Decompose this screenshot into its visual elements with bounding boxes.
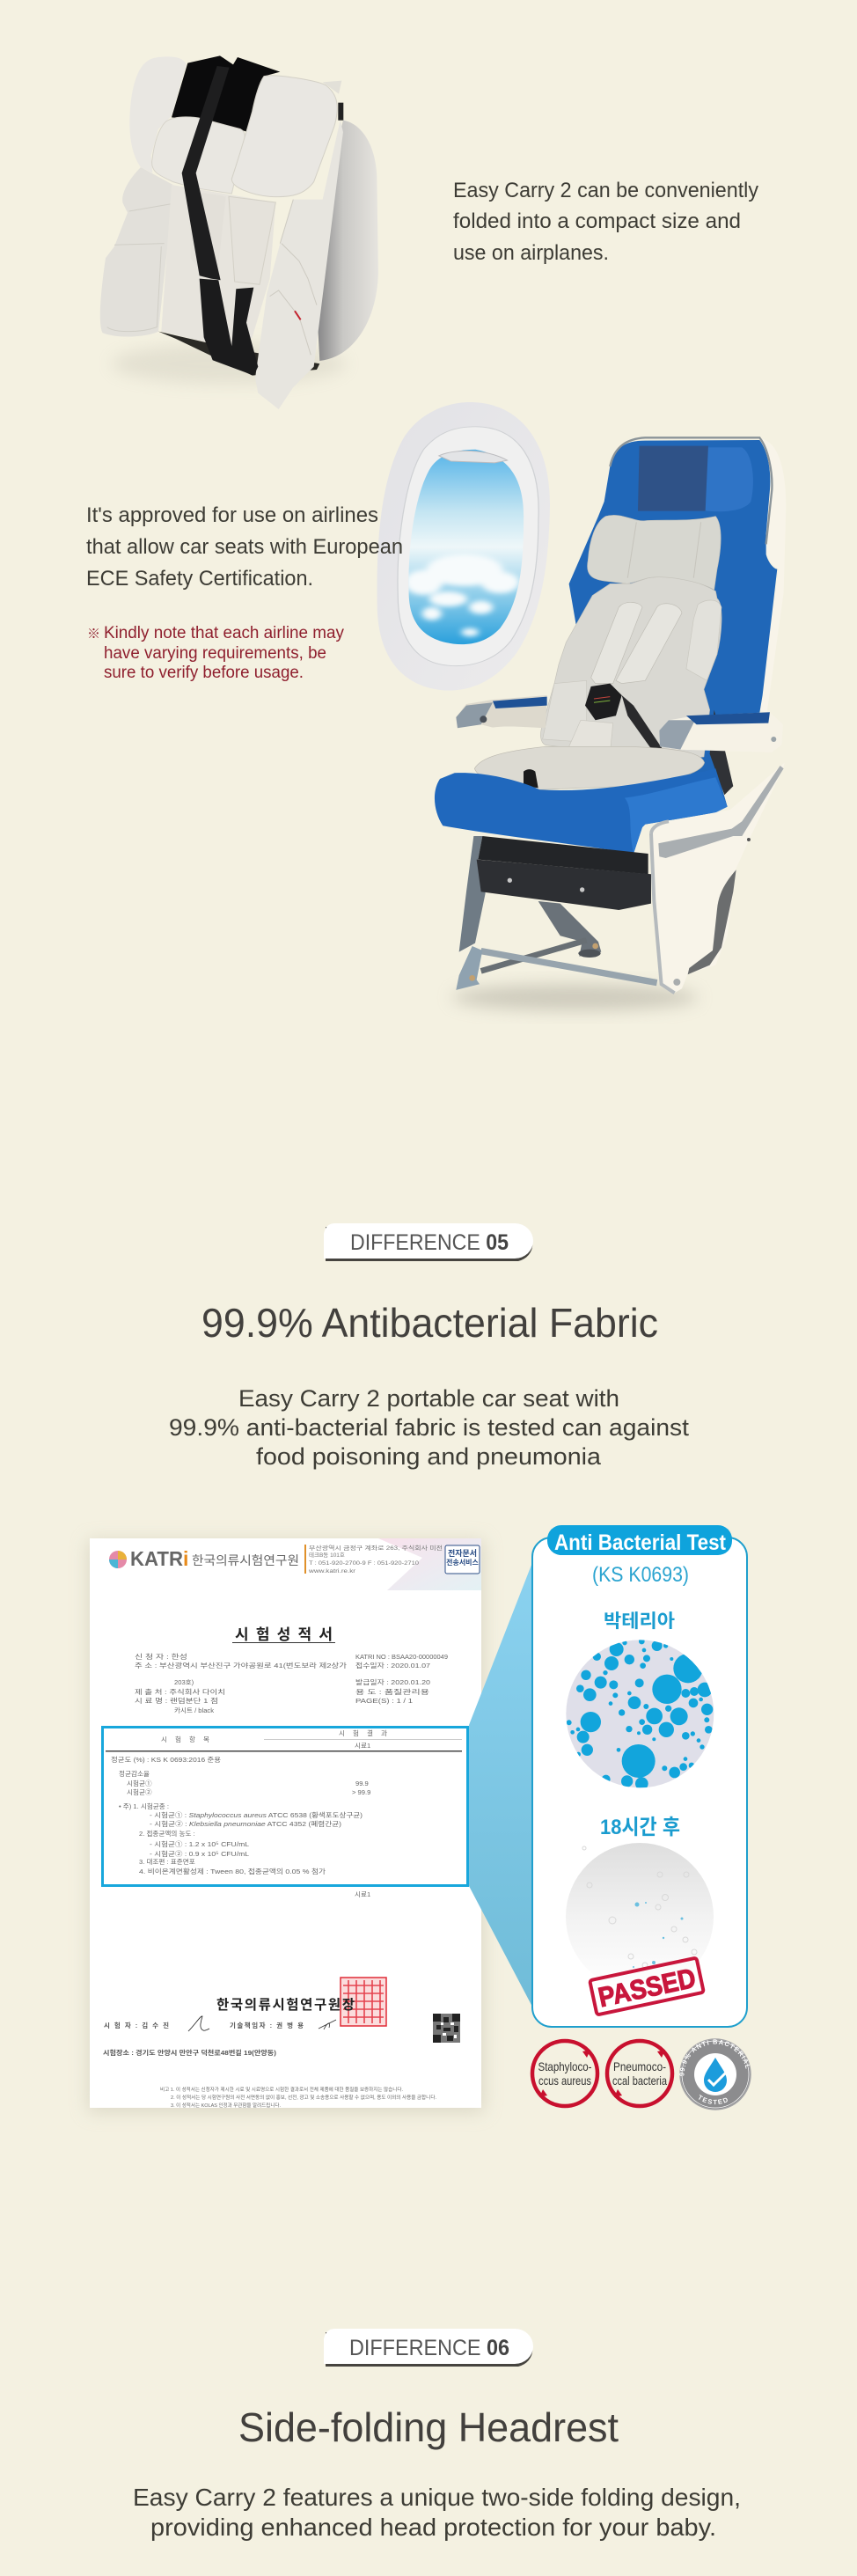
blue seat cushion [435, 768, 728, 854]
text: headrest description [133, 2484, 741, 2541]
note: airline requirements [87, 624, 344, 682]
table: test results: 99.9 [355, 1780, 369, 1787]
text: headrest description: Easy Carry 2 features a unique two-side folding design, [133, 2484, 741, 2511]
table: test results: 시 험 항 목 [161, 1736, 209, 1743]
icon: 99.9% anti bacterial tested seal: 99.9% ANTI BACTERIAL [679, 2039, 750, 2076]
logo: KATRI: KATR [130, 1547, 183, 1570]
blue seat back [569, 440, 777, 807]
signature block: 시험장소 : 경기도 안양시 만안구 덕천로48번길 19(안양동) [103, 2048, 277, 2057]
text: institute address: www.katri.re.kr [308, 1568, 356, 1574]
dish: with bacteria [566, 1639, 714, 1790]
text: folding description: use on airplanes. [453, 241, 609, 265]
headrest [638, 446, 753, 511]
note: airline requirements: have varying requirements, be [104, 644, 326, 663]
table: test results: - 시험균② : 0.9 x 10⁵ CFU/mL [150, 1850, 249, 1858]
text: report metadata: 시 료 명 : 랜덤분단 1 점 [135, 1696, 218, 1705]
signature block: 시 험 자 : 김 수 진 [104, 2021, 169, 2029]
side support panel [651, 763, 785, 993]
text: institute address [308, 1544, 443, 1574]
stamp: electronic document service [445, 1545, 480, 1574]
icon: Staphylococcus aureus [532, 2041, 597, 2106]
dish: after 18 hours [566, 1843, 714, 1991]
armrests [456, 695, 783, 752]
table: test results: 시험균① [127, 1780, 152, 1787]
table: test results: 정균감소율 [119, 1769, 150, 1778]
badge: difference 05: DIFFERENCE 05 [350, 1230, 509, 1255]
heading: side-folding headrest: Side-folding Headrest [238, 2404, 619, 2450]
text: report metadata: 접수일자 : 2020.01.07 [355, 1662, 430, 1670]
signature block: 기술책임자 : 권 병 용 [230, 2021, 304, 2029]
text: folding description [453, 179, 758, 265]
table: test results: - 시험균① : Staphylococcus aureus ATCC 6538 (황색포도상구균) [150, 1810, 363, 1819]
text: folding description: folded into a compact size and [453, 209, 741, 233]
text: footnotes [160, 2086, 436, 2109]
highlight: results box [102, 1727, 468, 1885]
note: airline requirements: Kindly note that each airline may [104, 624, 344, 642]
table: test results: 시험균② [127, 1788, 152, 1796]
stamp: electronic document service: 전자문서 [448, 1548, 477, 1558]
table: test results: - 시험균② : Klebsiella pneumoniae ATCC 4352 (폐렴간균) [150, 1819, 342, 1828]
text: footnotes: 3. 이 성적서는 KOLAS 인정과 무관함을 알려드립니다. [171, 2102, 281, 2109]
table: test results: 시료1 [355, 1742, 370, 1750]
photo: car seat installed on airplane seat [435, 437, 786, 1010]
callout wedge [469, 1560, 533, 2008]
panel: test report document [88, 1538, 484, 2112]
note: airline requirements: sure to verify before usage. [104, 664, 304, 682]
icon: Staphylococcus aureus: Staphyloco- [538, 2059, 592, 2073]
stamp: passed: PASSED [596, 1963, 699, 2013]
text: report metadata [135, 1653, 448, 1714]
text: antibacterial description [169, 1385, 690, 1470]
text: airline approval: It's approved for use on airlines [86, 503, 378, 527]
photo: folded car seat [100, 55, 378, 409]
photo: airplane window [377, 402, 550, 691]
table: test results: 시료1 [355, 1890, 370, 1898]
text: report metadata: PAGE(S) : 1 / 1 [355, 1697, 413, 1705]
title: test report: 시 험 성 적 서 [235, 1626, 333, 1643]
seat back shell [758, 438, 786, 713]
label: after 18 hours: 18시간 후 [600, 1816, 680, 1839]
label: bacteria: 박테리아 [604, 1611, 675, 1632]
pill: panel title: Anti Bacterial Test [554, 1530, 727, 1555]
text: airline approval: ECE Safety Certification. [86, 567, 313, 591]
logo: KATRI: i [183, 1547, 188, 1570]
text: footnotes: 2. 이 성적서는 당 시험연구원의 사전 서면동의 없이 홍보, 선전, 광고 및 소송용으로 사용할 수 없으며, 용도 이외의 사용을 금합니다. [171, 2094, 436, 2101]
table: test results: • 주) 1. 시험균종 : [119, 1802, 169, 1810]
QR code [433, 2014, 460, 2043]
text: institute address: 부산광역시 금정구 계좌로 263, 주식회사 미전 [309, 1544, 443, 1552]
table: test results [106, 1728, 462, 1898]
text: antibacterial description: Easy Carry 2 portable car seat with [238, 1385, 619, 1412]
text: report metadata: 발급일자 : 2020.01.20 [355, 1677, 430, 1686]
car seat body [474, 515, 721, 789]
text: institute address: T : 051-920-2700-9 F : 051-920-2710 [309, 1560, 419, 1567]
stamp: electronic document service: 전송서비스 [446, 1558, 480, 1567]
text: report metadata: 용 도 : 품질관리용 [355, 1687, 429, 1696]
logo: KATRI [109, 1545, 306, 1574]
note: airline requirements: ※ [87, 627, 100, 642]
text: folding description: Easy Carry 2 can be conveniently [453, 179, 758, 202]
icon: pneumococcal bacteria: Pneumoco- [613, 2059, 666, 2073]
text: antibacterial description: food poisoning and pneumonia [256, 1443, 602, 1470]
text: report metadata: 카시트 / black [174, 1706, 214, 1714]
table: test results: 2. 접종균액의 농도 : [139, 1829, 195, 1838]
icon: 99.9% anti bacterial tested seal [679, 2038, 751, 2110]
icon: pneumococcal bacteria: ccal bacteria [612, 2073, 667, 2088]
text: institute address: 테크B동 101호 [309, 1552, 345, 1559]
table: test results: - 시험균① : 1.2 x 10⁵ CFU/mL [150, 1840, 249, 1848]
badge: difference 05 [324, 1223, 533, 1261]
table: test results: 4. 비이온계면활성제 : Tween 80, 접종균액의 0.05 % 첨가 [139, 1867, 326, 1875]
text: antibacterial description: 99.9% anti-bacterial fabric is tested can against [169, 1414, 690, 1441]
logo: KATRI: 한국의류시험연구원 [192, 1553, 299, 1567]
text: report metadata: 203호) [174, 1678, 194, 1686]
icon: 99.9% anti bacterial tested seal: TESTED [699, 2095, 728, 2105]
table: test results: 정균도 (%) : KS K 0693:2016 준용 [111, 1755, 221, 1764]
badge: difference 06 [324, 2329, 533, 2367]
signature block: 한국의류시험연구원장 [216, 1997, 355, 2013]
icon: pneumococcal bacteria [607, 2041, 672, 2106]
text: report metadata: KATRI NO : BSAA20-00000049 [355, 1653, 448, 1661]
table: test results: 3. 대조편 : 표준면포 [139, 1857, 195, 1866]
text: airline approval: that allow car seats with European [86, 535, 403, 559]
table: test results: 시 험 결 과 [339, 1728, 387, 1737]
icon: Staphylococcus aureus: ccus aureus [538, 2073, 591, 2088]
text: standard code: (KS K0693) [592, 1563, 689, 1587]
signature block [103, 1978, 386, 2057]
text: airline approval [86, 503, 403, 591]
text: report metadata: 제 출 처 : 주식회사 다이치 [135, 1687, 225, 1696]
text: footnotes: 비고 1. 이 성적서는 신청자가 제시한 시료 및 시료명으로 시험한 결과로서 전체 제품에 대한 품질을 보증하지는 않습니다. [160, 2086, 403, 2093]
panel: anti bacterial test [532, 1525, 747, 2027]
badge: difference 06: DIFFERENCE 06 [349, 2336, 509, 2360]
text: report metadata: 주 소 : 부산광역시 부산진구 가야공원로 41(번도보라 제2상가 [135, 1661, 347, 1670]
heading: antibacterial fabric: 99.9% Antibacterial Fabric [201, 1300, 658, 1346]
table: test results: > 99.9 [352, 1788, 370, 1796]
under-seat box and frame [456, 836, 657, 990]
text: report metadata: 신 청 자 : 한성 [135, 1653, 187, 1661]
text: headrest description: providing enhanced head protection for your baby. [150, 2514, 716, 2541]
